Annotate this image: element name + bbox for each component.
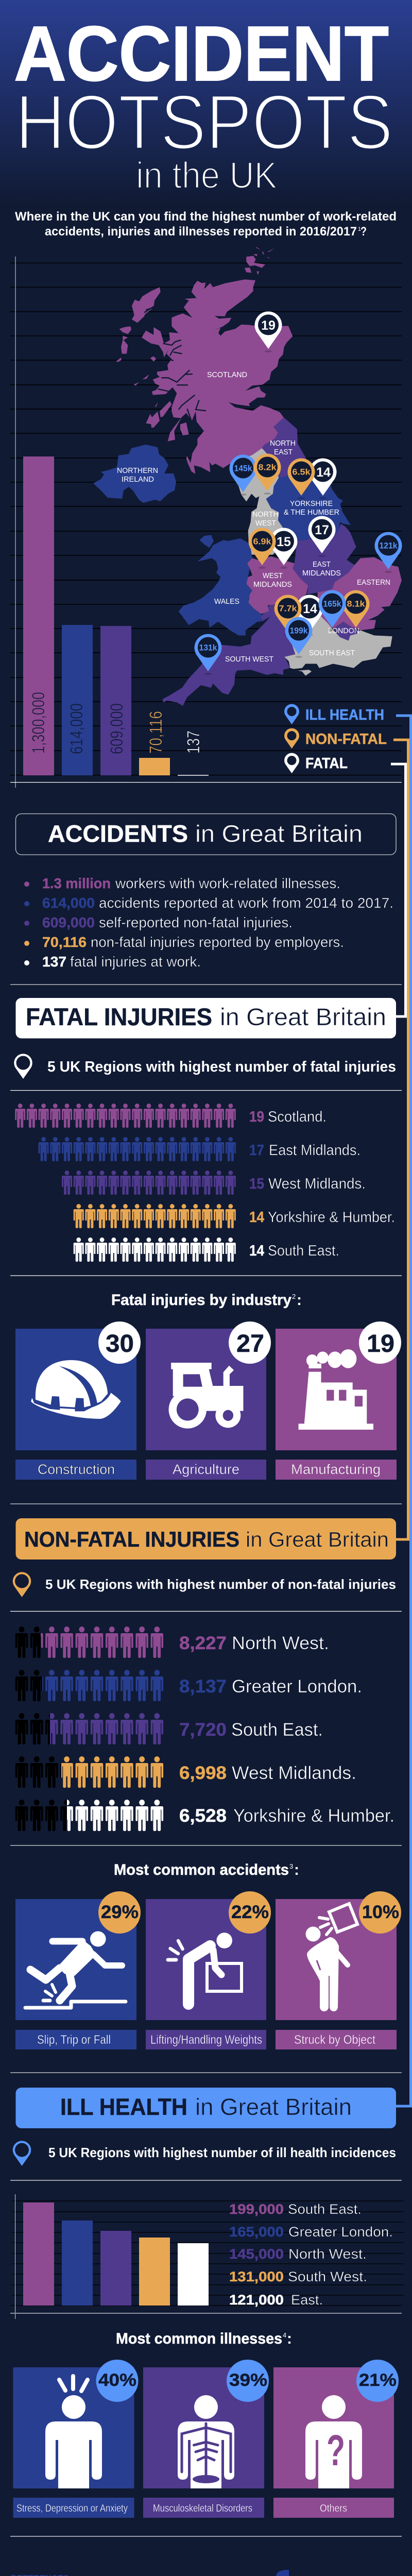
- panel: non-fatal injuries heading: [15, 1518, 396, 1560]
- panel: slip trip or fall: [15, 1891, 141, 2049]
- pin: London ill health 165k: 165k: [323, 599, 341, 609]
- panel: construction: 30: [106, 1330, 134, 1358]
- value: East: [229, 2292, 323, 2308]
- ill health chart axes: [10, 2194, 402, 2319]
- map region labels: IRELAND: [122, 476, 154, 484]
- row: South East 14: 14: [249, 1243, 264, 1259]
- value: North West: [229, 2246, 367, 2262]
- bar chart: overview totals: 614,000: [67, 703, 87, 754]
- heading: most common accidents: 3: [289, 1862, 293, 1870]
- pictogram rows: non-fatal injuries by region: [15, 1626, 394, 1831]
- row: Scotland 19: [15, 1104, 327, 1128]
- map region: Yorkshire and the Humber: [266, 474, 351, 541]
- logo: Boss Training: [276, 2570, 397, 2576]
- intro question: [15, 210, 397, 239]
- pin: North West ill health 145k: 145k: [234, 464, 252, 473]
- fatal regions subheading with pin: 5 UK Regions with highest number of fatal injuries: [47, 1059, 396, 1075]
- connector: non-fatal: [393, 739, 409, 1540]
- map region: East Midlands: [293, 524, 356, 594]
- value: North West: 145,000: [229, 2246, 284, 2262]
- row: Yorkshire and Humber 6,528: 6,528: [179, 1806, 227, 1826]
- panel: lifting and handling weights: [146, 1891, 271, 2049]
- legend item: fatal: [284, 753, 348, 773]
- title: ACCIDENT: [14, 10, 389, 97]
- value: Greater London: Greater London.: [288, 2224, 393, 2240]
- map region labels: NORTHERN: [117, 467, 158, 475]
- heading: fatal injuries by industry: 2: [292, 1293, 296, 1300]
- pin: North West non-fatal 8.2k: [253, 453, 281, 495]
- accidents bullet list: [24, 875, 393, 970]
- icon: tractor: [169, 1363, 243, 1429]
- panel: accidents heading: in Great Britain: [195, 820, 363, 847]
- overview chart gridlines: [10, 263, 402, 775]
- map region labels: EAST: [313, 561, 331, 569]
- row: South East 7,720: [15, 1713, 323, 1744]
- bullet: 609,000: 609,000: [42, 914, 95, 930]
- value: South West: 131,000: [229, 2269, 284, 2284]
- pin: London non-fatal 8.1k: [342, 590, 370, 631]
- value: Greater London: [229, 2224, 393, 2240]
- panel: stress depression or anxiety: 40%: [98, 2370, 136, 2390]
- intro question: ?: [360, 225, 367, 239]
- row: West Midlands 15: West Midlands.: [268, 1176, 366, 1192]
- bullet: 70,116: 70,116: [42, 934, 87, 950]
- ill health region values: [229, 2201, 393, 2308]
- panel: musculoskeletal disorders: 39%: [229, 2370, 267, 2390]
- pin: Yorkshire non-fatal 6.5k: 6.5k: [293, 467, 311, 477]
- panel: fatal injuries heading: in Great Britain: [220, 1003, 386, 1030]
- icon: person with question mark: [305, 2395, 362, 2488]
- value: South East: 199,000: [229, 2201, 284, 2217]
- pin: West Midlands non-fatal 6.9k: 6.9k: [253, 537, 271, 546]
- icon: stressed person: [45, 2376, 102, 2488]
- chart axes: [10, 257, 402, 788]
- row: Yorkshire and Humber 6,528: [15, 1800, 394, 1831]
- row: East Midlands 17: East Midlands.: [269, 1142, 360, 1159]
- pin: South East fatal 14: 14: [303, 602, 317, 616]
- row: Greater London 8,137: 8,137: [179, 1676, 227, 1697]
- row: Yorkshire and Humber 14: 14: [249, 1209, 264, 1226]
- pin: Yorkshire non-fatal 6.5k: [287, 459, 315, 499]
- panel: ill health heading: [15, 2088, 396, 2128]
- ill health regions subheading with pin: 5 UK Regions with highest number of ill health incidences: [48, 2145, 396, 2160]
- panel: manufacturing: 19: [367, 1330, 394, 1358]
- value: East: East.: [291, 2292, 323, 2308]
- intro question: accidents, injuries and illnesses reported in 2016/2017: [45, 225, 357, 239]
- row: South East 7,720: 7,720: [179, 1720, 227, 1740]
- icon: hard hat: [31, 1360, 121, 1419]
- pin: South West ill health 131k: [195, 634, 221, 675]
- panel: struck by object: [276, 1891, 401, 2049]
- row: South East 14: South East.: [268, 1243, 339, 1259]
- panel: slip trip or fall: 29%: [101, 1902, 139, 1922]
- value: South East: South East.: [288, 2201, 362, 2217]
- non-fatal regions subheading with pin: 5 UK Regions with highest number of non-fatal injuries: [45, 1577, 396, 1592]
- fatal regions subheading with pin: [14, 1054, 396, 1079]
- panel: agriculture: 27: [236, 1330, 264, 1358]
- bar chart: overview totals: 1,300,000: [29, 692, 48, 754]
- pin: Scotland fatal 19: 19: [261, 318, 276, 333]
- bullet: 614,000: 614,000: [42, 895, 95, 911]
- map region labels: WALES: [214, 598, 239, 606]
- non-fatal regions subheading with pin: [13, 1572, 396, 1597]
- row: West Midlands 6,998: [15, 1756, 356, 1788]
- heading: most common accidents: Most common accidents: [114, 1861, 289, 1878]
- map region labels: EASTERN: [357, 579, 390, 587]
- pin: South East non-fatal 7.7k: 7.7k: [279, 604, 297, 613]
- row: West Midlands 15: 15: [249, 1176, 264, 1192]
- map region: London: [333, 622, 359, 640]
- value: South West: South West.: [288, 2269, 367, 2284]
- heading: most common accidents: :: [294, 1861, 299, 1878]
- map region labels: WEST: [263, 572, 283, 580]
- icon: slipping figure: [25, 1931, 126, 2008]
- connector: fatal: [391, 762, 407, 1018]
- title: [14, 10, 393, 196]
- panel: musculoskeletal disorders: [143, 2360, 269, 2518]
- value: South East: [229, 2201, 362, 2217]
- panel: agriculture: Agriculture: [173, 1462, 239, 1477]
- value: Greater London: 165,000: [229, 2224, 284, 2240]
- map region labels: SCOTLAND: [207, 371, 247, 379]
- map region: North East: [262, 417, 312, 487]
- row: Greater London 8,137: Greater London.: [232, 1676, 362, 1697]
- map region: Eastern: [318, 557, 402, 630]
- map pins: [195, 311, 402, 675]
- pin: Eastern ill health 121k: [375, 532, 402, 573]
- map region labels: SOUTH EAST: [309, 649, 355, 657]
- bar chart: ill health by region: [23, 2202, 209, 2306]
- map region labels: MIDLANDS: [302, 569, 341, 578]
- logo mark: [276, 2570, 322, 2576]
- panel: fatal injuries heading: [15, 998, 396, 1039]
- map region: South East: [284, 599, 392, 676]
- pin: West Midlands non-fatal 6.9k: [248, 528, 276, 569]
- pin: East Midlands fatal 17: 17: [315, 523, 329, 537]
- heading: fatal injuries by industry: Fatal injuries by industry: [111, 1292, 291, 1309]
- icon: factory: [299, 1349, 373, 1430]
- pin: London non-fatal 8.1k: 8.1k: [347, 599, 365, 609]
- legend item: fatal: FATAL: [305, 755, 348, 772]
- icon: person lifting box: [168, 1933, 242, 2004]
- row: West Midlands 15: [62, 1171, 366, 1195]
- panel: non-fatal injuries heading: in Great Britain: [246, 1528, 389, 1551]
- row: West Midlands 6,998: West Midlands.: [232, 1763, 356, 1783]
- map region labels: & THE HUMBER: [284, 509, 339, 517]
- ill health chart gridlines: [10, 2201, 404, 2306]
- map region: North West: [232, 448, 288, 555]
- row: Scotland 19: 19: [249, 1109, 264, 1125]
- heading: most common illnesses: 4: [283, 2331, 286, 2339]
- map region labels: NORTH: [270, 439, 296, 448]
- map region labels: WEST: [255, 519, 276, 528]
- pin: Yorkshire fatal 14: [309, 459, 337, 499]
- legend item: ill health: [284, 704, 384, 724]
- panel: construction: Construction: [38, 1462, 115, 1477]
- pin: London ill health 165k: [318, 590, 346, 631]
- pin: East Midlands fatal 17: [308, 516, 336, 557]
- pin: Eastern ill health 121k: 121k: [379, 541, 398, 550]
- bullet: 70,116: non-fatal injuries reported by employers.: [91, 934, 344, 950]
- legend item: non-fatal: NON-FATAL: [305, 731, 387, 748]
- panel: manufacturing: [276, 1321, 401, 1480]
- bullet: 137: fatal injuries at work.: [70, 954, 201, 970]
- panel: slip trip or fall: Slip, Trip or Fall: [37, 2033, 111, 2047]
- panel: other illnesses: [273, 2360, 399, 2518]
- map region: West Midlands: [246, 556, 308, 614]
- map of the UK: [93, 246, 402, 706]
- pin: South East ill health 199k: 199k: [289, 625, 308, 636]
- map region labels: EAST: [274, 448, 293, 456]
- icon: person with skeleton: [178, 2395, 234, 2488]
- heading: most common illnesses: :: [287, 2330, 292, 2347]
- value: South West: [229, 2269, 367, 2284]
- map region labels: SOUTH WEST: [225, 655, 273, 664]
- panel: musculoskeletal disorders: Musculoskeletal Disorders: [153, 2503, 252, 2514]
- panel: construction: [15, 1321, 141, 1480]
- row: Scotland 19: Scotland.: [268, 1109, 327, 1125]
- map region labels: MIDLANDS: [253, 581, 292, 589]
- row: South East 7,720: South East.: [231, 1720, 323, 1740]
- panel: lifting and handling weights: Lifting/Handling Weights: [150, 2033, 262, 2047]
- legend item: non-fatal: [284, 728, 387, 749]
- heading: fatal injuries by industry: :: [297, 1292, 302, 1309]
- panel: stress depression or anxiety: Stress, Depression or Anxiety: [16, 2503, 128, 2514]
- panel: struck by object: Struck by Object: [294, 2033, 375, 2047]
- panel: manufacturing: Manufacturing: [291, 1462, 381, 1477]
- panel: struck by object: 10%: [362, 1902, 399, 1922]
- title: in the UK: [136, 155, 277, 196]
- map region labels: NORTH: [252, 511, 279, 519]
- map region: Scotland: [116, 246, 293, 474]
- row: Yorkshire and Humber 6,528: Yorkshire & Humber.: [233, 1806, 394, 1826]
- row: Yorkshire and Humber 14: Yorkshire & Humber.: [268, 1209, 395, 1226]
- bullet: 609,000: self-reported non-fatal injuries.: [99, 914, 293, 930]
- row: North West 8,227: North West.: [232, 1633, 329, 1653]
- row: Yorkshire and Humber 14: [74, 1204, 395, 1228]
- panel: other illnesses: Others: [320, 2503, 347, 2514]
- pin: Yorkshire fatal 14: 14: [316, 465, 331, 480]
- map region labels: [117, 371, 390, 664]
- bar chart: overview totals: 70,116: [146, 711, 166, 754]
- bar chart: overview totals: 609,000: [107, 703, 127, 754]
- bar chart: overview totals: [23, 456, 209, 776]
- intro question: 1: [358, 226, 361, 232]
- row: East Midlands 17: [39, 1137, 360, 1161]
- bullet: 1.3 million: 1.3 million: [42, 875, 111, 891]
- panel: other illnesses: 21%: [359, 2370, 397, 2390]
- pictogram rows: fatal injuries by region: [15, 1104, 395, 1262]
- pin: South East fatal 14: [296, 595, 323, 636]
- connector: ill health: [396, 714, 412, 2107]
- pin: West Midlands fatal 15: 15: [277, 535, 291, 549]
- panel: lifting and handling weights: 22%: [231, 1902, 269, 1922]
- map region: South West: [163, 604, 295, 706]
- map region labels: YORKSHIRE: [290, 500, 333, 508]
- row: North West 8,227: 8,227: [179, 1633, 227, 1653]
- ill health regions subheading with pin: [13, 2141, 396, 2166]
- legend: pin key: [284, 704, 387, 773]
- value: East: 121,000: [229, 2292, 284, 2308]
- map region labels: LONDON: [328, 627, 359, 635]
- map region: Northern Ireland: [93, 445, 176, 503]
- pin: North West ill health 145k: [230, 454, 256, 496]
- icon: person with question mark: ?: [327, 2426, 345, 2475]
- value: North West: North West.: [288, 2246, 367, 2262]
- pin: South East ill health 199k: [285, 617, 312, 658]
- row: East Midlands 17: 17: [249, 1142, 264, 1159]
- panel: stress depression or anxiety: [13, 2360, 138, 2518]
- panel: accidents heading: ACCIDENTS: [48, 820, 188, 847]
- panel: fatal injuries heading: FATAL INJURIES: [26, 1003, 212, 1030]
- panel: non-fatal injuries heading: NON-FATAL INJURIES: [24, 1527, 239, 1551]
- map region: Wales: [179, 535, 262, 635]
- row: Greater London 8,137: [15, 1670, 362, 1701]
- panel: accidents heading: [15, 814, 396, 855]
- pin: Scotland fatal 19: [254, 311, 282, 352]
- pin: North West non-fatal 8.2k: 8.2k: [259, 463, 277, 472]
- bullet: 614,000: accidents reported at work from 2014 to 2017.: [99, 895, 393, 911]
- bullet: 1.3 million: workers with work-related illnesses.: [115, 875, 340, 891]
- bar chart: overview totals: 137: [184, 731, 203, 754]
- heading: most common illnesses: Most common illnesses: [116, 2330, 282, 2347]
- pin: West Midlands fatal 15: [270, 528, 298, 569]
- panel: ill health heading: in Great Britain: [195, 2094, 352, 2120]
- legend item: ill health: ILL HEALTH: [305, 707, 384, 723]
- pin: South East non-fatal 7.7k: [274, 595, 302, 636]
- row: South East 14: [74, 1238, 339, 1262]
- icon: person struck by object: [306, 1904, 357, 2011]
- bullet: 137: 137: [42, 954, 66, 970]
- row: West Midlands 6,998: 6,998: [179, 1763, 227, 1783]
- intro question: Where in the UK can you find the highest number of work-related: [15, 210, 397, 224]
- row: North West 8,227: [15, 1626, 329, 1658]
- panel: agriculture: [146, 1321, 271, 1480]
- pin: South West ill health 131k: 131k: [199, 643, 217, 652]
- panel: ill health heading: ILL HEALTH: [60, 2094, 187, 2120]
